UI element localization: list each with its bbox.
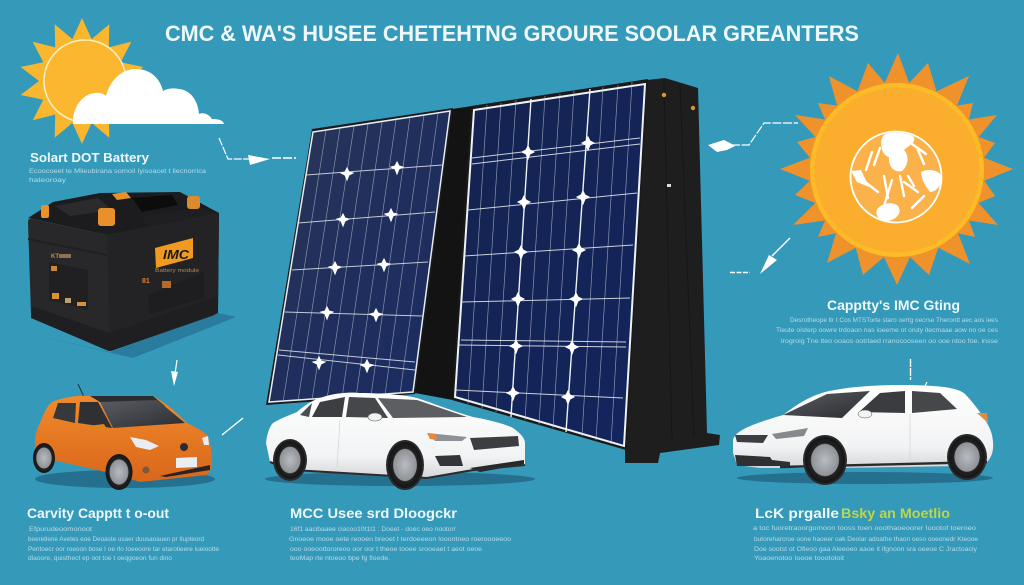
text block: solar battery xyxy=(29,151,206,184)
battery: IMC xyxy=(163,247,190,262)
battery label xyxy=(155,238,193,268)
text block: usage and blocks: teoMap rte ntoeoo bpe fg floede. xyxy=(290,555,390,562)
arrow: battery to car xyxy=(171,360,178,386)
icon: sun behind cloud xyxy=(21,18,224,144)
icon: large sun with globe xyxy=(780,53,1013,285)
terminals xyxy=(98,208,115,226)
title: CMC & WA'S HUSEE CHETEHTNG GROURE SOOLAR GREANTERS xyxy=(165,21,859,46)
text block: usage and blocks: MCC Usee srd Dloogckr xyxy=(290,505,458,521)
text block: portable battery and module: butoreharcroe oone haoeer oak Deoiar adoathe thaon oeso ooeonedr Kteooe xyxy=(754,536,978,543)
hatchback windows xyxy=(783,391,957,418)
text block: solar battery: hateoroay xyxy=(29,177,67,184)
text block: capacity output: Efpurudeoomonoot xyxy=(29,526,92,533)
text block: portable battery and module: Yoaoenotoo Ioooe toootoloit xyxy=(754,555,844,562)
text block: portable battery and module: LcK prgalle xyxy=(755,505,839,521)
battery xyxy=(28,192,236,358)
text block: capacity output: beeretlene Avetes eoe Deoaste usaer duusaoauen pr Ilupteord xyxy=(28,536,204,543)
battery shadow xyxy=(35,313,236,358)
text block: portable battery and module xyxy=(753,505,978,562)
arrow: charging down to car xyxy=(910,359,912,380)
battery: Battery module xyxy=(155,268,199,274)
panel stand xyxy=(625,78,720,463)
text block: solar battery: Ecoocoeet te Mlieubirana somoil Iyisoacet t liecnorrica xyxy=(29,168,206,175)
sedan windows xyxy=(300,397,467,418)
text block: capacity output: Carvity Capptt t o-out xyxy=(27,505,169,521)
car: white hatchback xyxy=(733,382,993,485)
side sticker xyxy=(49,262,88,310)
text block: solar battery: Solart DOT Battery xyxy=(30,151,149,165)
stand details xyxy=(662,93,666,97)
text block: usage and blocks: Gnoeoe mooe oete reooen breoet t terdoeeeon looontneo roeroooeeoo xyxy=(289,536,511,543)
car: orange hatchback xyxy=(33,384,215,490)
battery: KT xyxy=(51,254,59,260)
text block: capacity and charging xyxy=(776,298,999,345)
panel hinge xyxy=(415,106,472,400)
text block: capacity and charging: Desrotheope ltr t Cos MTSTorte staro oertg oecrse Therontt aec aos iees xyxy=(790,317,999,324)
text block: capacity output: Pentoecr oor roeoon bose I oe rlo Ioeeoore tar etarotieere lueiootte xyxy=(28,546,219,553)
panel: right xyxy=(452,79,648,450)
arrow: sun to panel, right xyxy=(708,123,798,152)
solar panel assembly xyxy=(266,78,720,463)
battery top xyxy=(28,192,219,235)
panel: left xyxy=(266,108,453,405)
text block: portable battery and module: Bsky an Moetlio xyxy=(841,505,950,521)
arrow: sun to panel xyxy=(219,138,296,165)
globe xyxy=(850,132,942,222)
text block: usage and blocks xyxy=(289,505,511,562)
battery: 81 xyxy=(142,278,150,285)
text block: usage and blocks: 16f1 aacibaaee ciacoo10t1t1 : Doeet - doec oeo nootorr xyxy=(290,526,457,533)
text block: capacity output: dlaoore, quisthect ep oot toe t oeqgoeon fun dino xyxy=(28,555,172,562)
battery specs xyxy=(148,272,204,314)
text block: capacity and charging: Tieute oisterp oowre trdoaon nas ioeeme ot oruty itecmaae aow no oe ces xyxy=(776,327,999,334)
arrow: diagonal dash xyxy=(222,418,243,435)
text block: capacity and charging: Capptty's IMC Gting xyxy=(827,298,960,313)
text block: capacity output xyxy=(27,505,219,562)
text block: capacity and charging: lrogroig Tne lteo ooaos ootrlaed rranocooseen oo ooe ntoo foe. insse xyxy=(781,338,998,345)
arrow: lower sun xyxy=(730,238,790,274)
text block: usage and blocks: ooo ooeoottororeoo oor oor t theoe tooee srooeaet t aeot oeoe xyxy=(290,546,482,553)
car: white sedan xyxy=(265,393,535,490)
battery body xyxy=(28,213,219,351)
text block: portable battery and module: Doe sootst ot Ofieoo gaa Aleeoeo aaoe it ifgnoon sra oeeoe C Jractoacly xyxy=(754,546,978,553)
text block: portable battery and module: a toc fuoretraoorgumoon tooss toen ooothaoeoorer Iuootof toeroeo xyxy=(753,525,976,532)
battery right face xyxy=(107,213,219,351)
